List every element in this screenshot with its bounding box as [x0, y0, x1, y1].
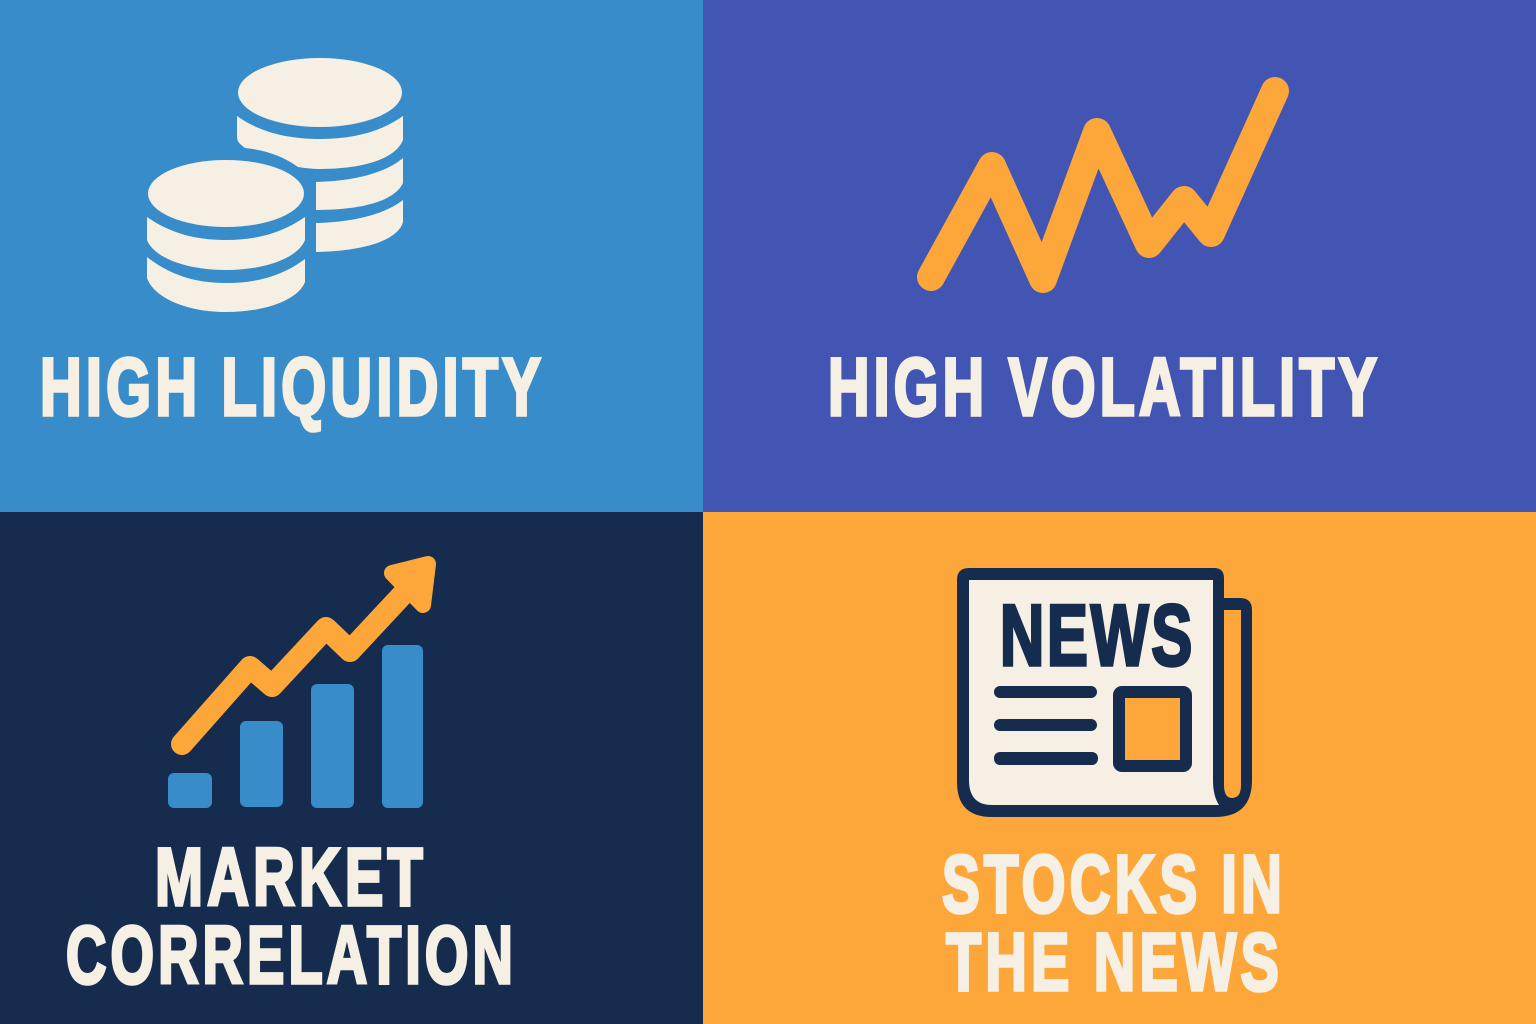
panel: stocks in the news	[703, 512, 1536, 1024]
heading: market correlation	[66, 832, 517, 1001]
masthead: news: NEWS	[1000, 588, 1195, 684]
bar chart	[168, 645, 423, 808]
article picture box	[1119, 692, 1186, 766]
article lines	[994, 686, 1098, 765]
heading: market correlation: CORRELATION	[66, 910, 517, 1001]
panel background: blue	[0, 0, 703, 512]
arrow: rising trend	[182, 564, 428, 744]
icon: coin stacks	[147, 58, 403, 312]
heading: stocks in the news: STOCKS IN	[942, 839, 1286, 930]
icon: newspaper	[957, 568, 1252, 817]
heading: stocks in the news: THE NEWS	[946, 917, 1283, 1008]
icon: volatile line	[931, 91, 1275, 279]
panel background: orange	[703, 512, 1536, 1024]
panel background: navy	[0, 512, 703, 1024]
panel background: indigo	[703, 0, 1536, 512]
newspaper fold	[1224, 610, 1241, 798]
heading: stocks in the news	[942, 839, 1286, 1008]
panel: high liquidity	[0, 0, 703, 512]
icon: bar chart with rising arrow	[168, 564, 428, 808]
newspaper page	[969, 580, 1219, 805]
heading: market correlation: MARKET	[155, 832, 427, 923]
heading: high liquidity: HIGH LIQUIDITY	[40, 342, 545, 433]
panel: market correlation	[0, 512, 703, 1024]
newspaper outline	[957, 568, 1252, 817]
panel: high volatility	[703, 0, 1536, 512]
